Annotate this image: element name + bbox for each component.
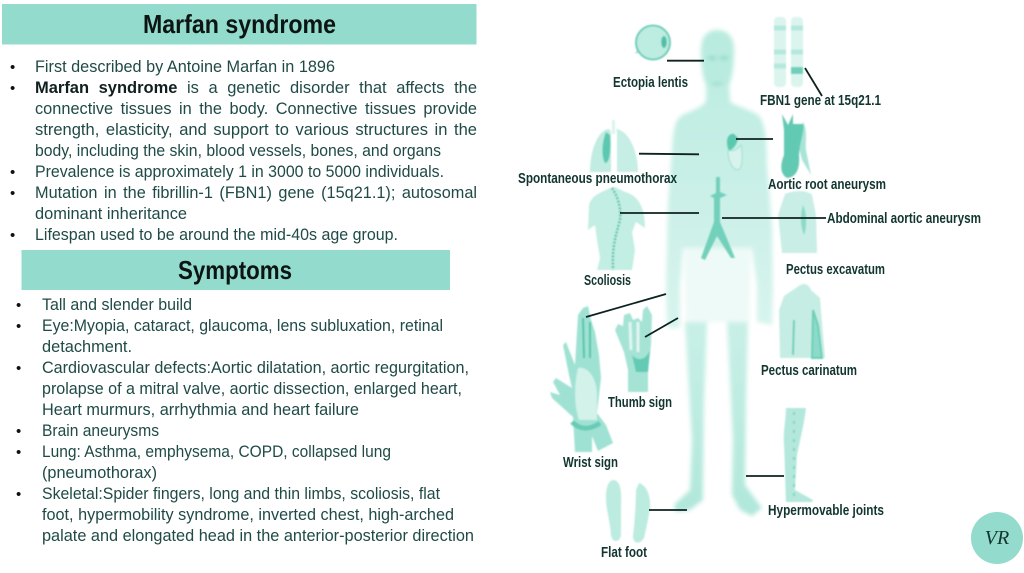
text block: overview bullet list: Lifespan used to be around the mid-40s age group. [35, 226, 398, 244]
anatomical labels: Pectus carinatum [761, 362, 857, 379]
text block: overview bullet list: • [10, 164, 15, 181]
title banner: Marfan syndrome: Marfan syndrome [143, 9, 336, 39]
text block: overview bullet list: connective tissues in the body. Connective tissues provide [35, 100, 477, 118]
anatomical labels: Aortic root aneurysm [768, 176, 886, 193]
anatomical labels: Thumb sign [608, 394, 672, 411]
icon: abdominal aorta [701, 177, 735, 260]
title banner: Marfan syndrome [2, 4, 476, 44]
text block: symptoms bullet list: • [16, 318, 21, 335]
anatomical labels: FBN1 gene at 15q21.1 [760, 92, 881, 109]
anatomical labels [518, 74, 981, 561]
text block: symptoms bullet list [16, 296, 474, 545]
body figure [666, 30, 773, 516]
text block: overview bullet list: Prevalence is approximately 1 in 3000 to 5000 individuals. [35, 163, 444, 181]
text block: overview bullet list: • [10, 59, 15, 76]
icon: pectus excavatum chest [778, 191, 817, 253]
text block: symptoms bullet list: • [16, 423, 21, 440]
text block: symptoms bullet list: Eye:Myopia, cataract, glaucoma, lens subluxation, retinal [42, 317, 443, 335]
text block: symptoms bullet list: • [16, 444, 21, 461]
text block: symptoms bullet list: foot, hypermobility syndrome, inverted chest, high-arched [42, 506, 454, 524]
text block: symptoms bullet list: • [16, 297, 21, 314]
anatomical labels: Ectopia lentis [613, 74, 688, 91]
connector lines [586, 61, 826, 510]
text block: symptoms bullet list: Brain aneurysms [42, 422, 159, 440]
logo: VR badge [971, 512, 1023, 564]
logo: VR badge: VR [985, 527, 1009, 549]
text block: overview bullet list: • [10, 227, 15, 244]
text block: overview bullet list [10, 58, 477, 244]
icon: flat feet [606, 480, 650, 543]
anatomical labels: Scoliosis [584, 272, 631, 289]
anatomical labels: Spontaneous pneumothorax [518, 170, 678, 187]
anatomical labels: Pectus excavatum [786, 261, 885, 278]
anatomical labels: Abdominal aortic aneurysm [827, 210, 981, 227]
text block: overview bullet list: • [10, 80, 15, 97]
icon: eye (ectopia lentis) [635, 26, 670, 60]
icon: pectus carinatum chest [779, 284, 825, 358]
text block: overview bullet list: First described by Antoine Marfan in 1896 [35, 58, 335, 76]
icon: leg (hypermovable joints) [784, 408, 813, 502]
text block: symptoms bullet list: detachment. [42, 338, 132, 356]
text block: symptoms bullet list: • [16, 486, 21, 503]
anatomical labels: Flat foot [601, 544, 647, 561]
text block: symptoms bullet list: Cardiovascular defects:Aortic dilatation, aortic regurgitation, [42, 359, 469, 377]
icon: heart in chest [727, 134, 742, 170]
icon: chromosomes (FBN1 gene) [774, 17, 803, 87]
text block: symptoms bullet list: Skeletal:Spider fingers, long and thin limbs, scoliosis, flat [42, 485, 440, 503]
icon: lungs [590, 120, 638, 172]
icon: long-fingered hand (wrist sign) [550, 306, 613, 452]
text block: symptoms bullet list: prolapse of a mitral valve, aortic dissection, enlarged heart, [42, 380, 462, 398]
icon: scoliosis torso [588, 187, 645, 270]
heading banner: Symptoms [22, 250, 450, 290]
heading banner: Symptoms: Symptoms [178, 255, 292, 285]
text block: overview bullet list: • [10, 185, 15, 202]
anatomical labels: Wrist sign [563, 454, 618, 471]
text block: overview bullet list: Marfan syndrome is a genetic disorder that affects the [35, 79, 477, 97]
text block: overview bullet list: Mutation in the fibrillin-1 (FBN1) gene (15q21.1); autosomal [35, 184, 477, 202]
text block: symptoms bullet list: (pneumothorax) [42, 464, 157, 482]
text block: symptoms bullet list: Heart murmurs, arrhythmia and heart failure [42, 401, 359, 419]
icon: thumb sign hand [615, 306, 652, 392]
text block: symptoms bullet list: Lung: Asthma, emphysema, COPD, collapsed lung [42, 443, 391, 461]
text block: symptoms bullet list: • [16, 360, 21, 377]
text block: symptoms bullet list: palate and elongated head in the anterior-posterior direction [42, 527, 474, 545]
icon: aortic root aneurysm [781, 114, 811, 178]
text block: overview bullet list: strength, elasticity, and support to various structures in the [35, 121, 477, 139]
text block: symptoms bullet list: Tall and slender build [42, 296, 192, 314]
text block: overview bullet list: body, including the skin, blood vessels, bones, and organs [35, 142, 441, 160]
anatomical labels: Hypermovable joints [768, 502, 884, 519]
text block: overview bullet list: dominant inheritance [35, 205, 187, 223]
